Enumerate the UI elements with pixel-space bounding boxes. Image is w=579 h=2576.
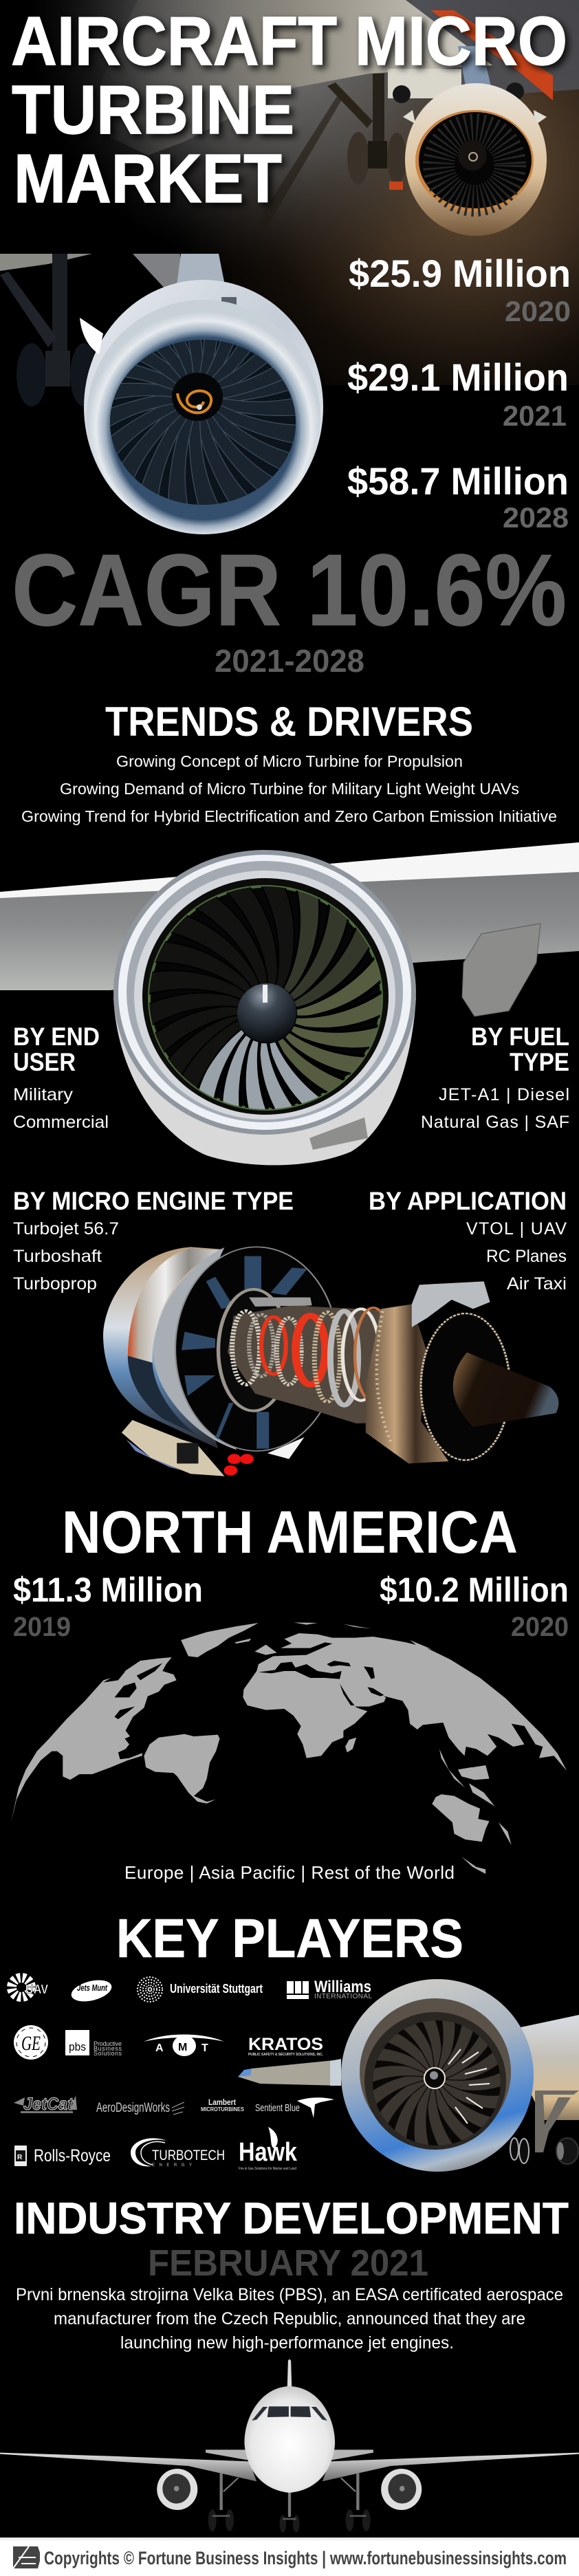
logo: JetCat: JetCat bbox=[23, 2095, 74, 2114]
logos row 3 bbox=[14, 2095, 334, 2118]
landing gear bbox=[208, 2474, 371, 2533]
north america figures: $10.2 Million bbox=[380, 1571, 569, 1609]
by micro engine type: Turbojet 56.7 bbox=[13, 1219, 119, 1238]
trends and drivers: Growing Concept of Micro Turbine for Propulsion bbox=[116, 752, 463, 770]
map: Southeast Asian islands bbox=[439, 1749, 512, 1845]
logo: AMT bbox=[144, 2034, 224, 2056]
engines bbox=[157, 2469, 422, 2510]
market size figures: $29.1 Million bbox=[347, 356, 569, 399]
logo: AMT: M bbox=[178, 2042, 187, 2053]
logo: pbs Productive Business Solutions: Productive bbox=[94, 2040, 122, 2047]
logo: Rolls-Royce: Rolls-Royce bbox=[34, 2146, 111, 2165]
logo: Williams International: INTERNATIONAL bbox=[314, 1993, 372, 2000]
regions list: Europe | Asia Pacific | Rest of the World bbox=[124, 1862, 455, 1883]
right wing and belly bbox=[521, 2015, 579, 2120]
horizontal stabilisers bbox=[206, 2449, 373, 2460]
north america heading: NORTH AMERICA bbox=[62, 1499, 518, 1566]
CAGR: 2021-2028 bbox=[215, 643, 364, 679]
turbofan with wing bbox=[238, 1979, 579, 2172]
logo: AMT: A bbox=[155, 2042, 164, 2054]
icon: Fortune Business Insights logo bbox=[13, 2546, 40, 2568]
main landing gear bbox=[510, 2091, 579, 2164]
logo: Rolls-Royce bbox=[14, 2146, 111, 2166]
logo: Williams International bbox=[287, 1978, 372, 2000]
logo: Kratos: PUBLIC SAFETY & SECURITY SOLUTIONS, INC. bbox=[248, 2053, 323, 2057]
by application: Air Taxi bbox=[507, 1274, 567, 1294]
nacelle lip bbox=[341, 1979, 534, 2172]
airplane front view bbox=[0, 2359, 579, 2533]
logo: Lambert Microturbines: Lambert bbox=[208, 2097, 236, 2107]
logos row 2 bbox=[14, 2025, 323, 2060]
footer band bbox=[0, 2537, 579, 2576]
map: inland seas and bays bbox=[103, 1661, 488, 1767]
by end user: USER bbox=[13, 1048, 76, 1076]
development description: manufacturer from the Czech Republic, announced that they are bbox=[54, 2309, 525, 2328]
logo: AMT: T bbox=[201, 2042, 208, 2054]
trends and drivers: Growing Trend for Hybrid Electrification and Zero Carbon Emission Initiative bbox=[21, 807, 557, 825]
tail fin bbox=[287, 2359, 292, 2388]
by micro engine type: Turboshaft bbox=[13, 1247, 102, 1266]
by fuel type: TYPE bbox=[510, 1048, 569, 1076]
by micro engine type: BY MICRO ENGINE TYPE bbox=[13, 1187, 294, 1215]
world map globe bbox=[11, 1622, 567, 1874]
logo: Hawk: Hawk bbox=[239, 2138, 298, 2167]
logo: Jets Munt bbox=[69, 1976, 113, 2005]
wings bbox=[0, 2453, 579, 2481]
logo: Rolls-Royce: R bbox=[17, 2154, 23, 2161]
title bbox=[11, 3, 567, 217]
trends and drivers bbox=[21, 699, 557, 825]
title: TURBINE bbox=[12, 72, 294, 149]
by end user bbox=[13, 1023, 109, 1132]
jet engine photo with landing gear bbox=[0, 254, 328, 534]
map: Madagascar bbox=[345, 1738, 356, 1752]
logo: Turbotech Energy bbox=[131, 2138, 225, 2168]
market size figures bbox=[347, 252, 571, 534]
by end user: Commercial bbox=[13, 1113, 109, 1132]
map: Afro-Eurasia bbox=[243, 1633, 567, 1771]
front fan case bbox=[103, 1247, 221, 1449]
logo: Hawk: Fire & Gas Solutions for Marine and Land bbox=[239, 2167, 296, 2171]
accessory gearbox bbox=[122, 1420, 224, 1476]
by fuel type: JET-A1 | Diesel bbox=[439, 1085, 569, 1104]
logo: Kratos: KRATOS bbox=[248, 2035, 323, 2054]
logo: Universitat Stuttgart bbox=[138, 1977, 263, 2002]
logo: Williams International: Williams bbox=[314, 1978, 371, 1996]
by application bbox=[369, 1187, 567, 1294]
exhaust cone bbox=[453, 1353, 559, 1427]
nacelle lip bbox=[113, 850, 416, 1135]
logos row 4 bbox=[14, 2127, 298, 2171]
key players heading: KEY PLAYERS bbox=[116, 1908, 463, 1969]
market size figures: 2020 bbox=[505, 295, 571, 327]
development description: Prvni brnenska strojirna Velka Bites (PBS), an EASA certificated aerospace bbox=[16, 2285, 563, 2304]
engine mount bbox=[412, 1281, 490, 1327]
logo: pbs Productive Business Solutions: Business bbox=[94, 2045, 122, 2052]
market size figures: $25.9 Million bbox=[349, 252, 571, 295]
development description: launching new high-performance jet engines. bbox=[120, 2333, 454, 2353]
by fuel type: BY FUEL bbox=[471, 1023, 569, 1051]
date: FEBRUARY 2021 bbox=[148, 2242, 428, 2284]
logo: Turbotech Energy: ENERGY bbox=[152, 2163, 192, 2168]
exhaust ring bbox=[421, 1313, 510, 1460]
logo: UAV Turbines: UAV bbox=[25, 1983, 48, 1996]
by micro engine type: Turboprop bbox=[13, 1274, 97, 1294]
map: North America bbox=[11, 1657, 177, 1822]
by end user: Military bbox=[13, 1085, 74, 1104]
map: South America bbox=[144, 1734, 220, 1804]
logo: Turbotech Energy: TURBOTECH bbox=[152, 2148, 225, 2163]
market size figures: 2021 bbox=[503, 400, 567, 432]
north america figures: $11.3 Million bbox=[13, 1571, 203, 1609]
logo: pbs Productive Business Solutions bbox=[65, 2030, 122, 2057]
map: British Isles bbox=[255, 1645, 277, 1655]
rear casing bbox=[366, 1305, 448, 1463]
nacelle body bbox=[113, 997, 416, 1165]
logo: AeroDesignWorks: AeroDesignWorks bbox=[96, 2101, 170, 2115]
industry development heading: INDUSTRY DEVELOPMENT bbox=[14, 2193, 569, 2243]
logo: Sentient Blue: Sentient Blue bbox=[255, 2102, 300, 2114]
by application: RC Planes bbox=[486, 1247, 567, 1266]
north america figures: 2019 bbox=[13, 1612, 71, 1642]
hero photo: aircraft on the apron bbox=[0, 0, 579, 385]
title: MARKET bbox=[14, 140, 282, 217]
market size figures: 2028 bbox=[503, 501, 569, 534]
by fuel type bbox=[421, 1023, 569, 1132]
logo: pbs Productive Business Solutions: Solutions bbox=[94, 2050, 122, 2057]
by micro engine type bbox=[13, 1187, 294, 1294]
north america figures: 2020 bbox=[511, 1612, 569, 1642]
by application: BY APPLICATION bbox=[369, 1187, 567, 1215]
logo: GE: GE bbox=[21, 2032, 41, 2055]
trends and drivers: TRENDS & DRIVERS bbox=[105, 699, 473, 745]
logos row 1 bbox=[12, 1976, 372, 2005]
compressor and combustor core bbox=[218, 1289, 289, 1411]
by application: VTOL | UAV bbox=[466, 1219, 567, 1238]
logo: GE bbox=[14, 2025, 48, 2060]
map: New Zealand bbox=[461, 1857, 485, 1874]
fan struts bbox=[182, 1256, 307, 1449]
logo: Hawk bbox=[239, 2127, 298, 2171]
by end user: BY END bbox=[13, 1023, 100, 1051]
logo: Sentient Blue bbox=[255, 2097, 334, 2118]
market size figures: $58.7 Million bbox=[347, 459, 569, 503]
development description bbox=[16, 2285, 563, 2353]
map: Greenland and Iceland bbox=[181, 1622, 432, 1657]
logo: Lambert Microturbines bbox=[201, 2097, 245, 2113]
trends and drivers: Growing Demand of Micro Turbine for Military Light Weight UAVs bbox=[60, 780, 519, 798]
cockpit windows bbox=[252, 2406, 327, 2421]
icon: cutaway micro turbine engine bbox=[103, 1247, 559, 1476]
by fuel type: Natural Gas | SAF bbox=[421, 1113, 569, 1132]
fuselage bbox=[244, 2386, 335, 2493]
logo: pbs Productive Business Solutions: pbs bbox=[69, 2040, 86, 2053]
wing with turbofan bbox=[0, 842, 579, 1165]
logo: Jets Munt: Jets Munt bbox=[77, 1983, 107, 1993]
map: Australia bbox=[432, 1794, 490, 1842]
north america figures bbox=[13, 1571, 569, 1642]
logo: Lambert Microturbines: MICROTURBINES bbox=[201, 2106, 245, 2113]
logo: UAV Turbines bbox=[12, 1978, 48, 1997]
logo: Universitat Stuttgart: Universität Stuttgart bbox=[170, 1982, 263, 1996]
